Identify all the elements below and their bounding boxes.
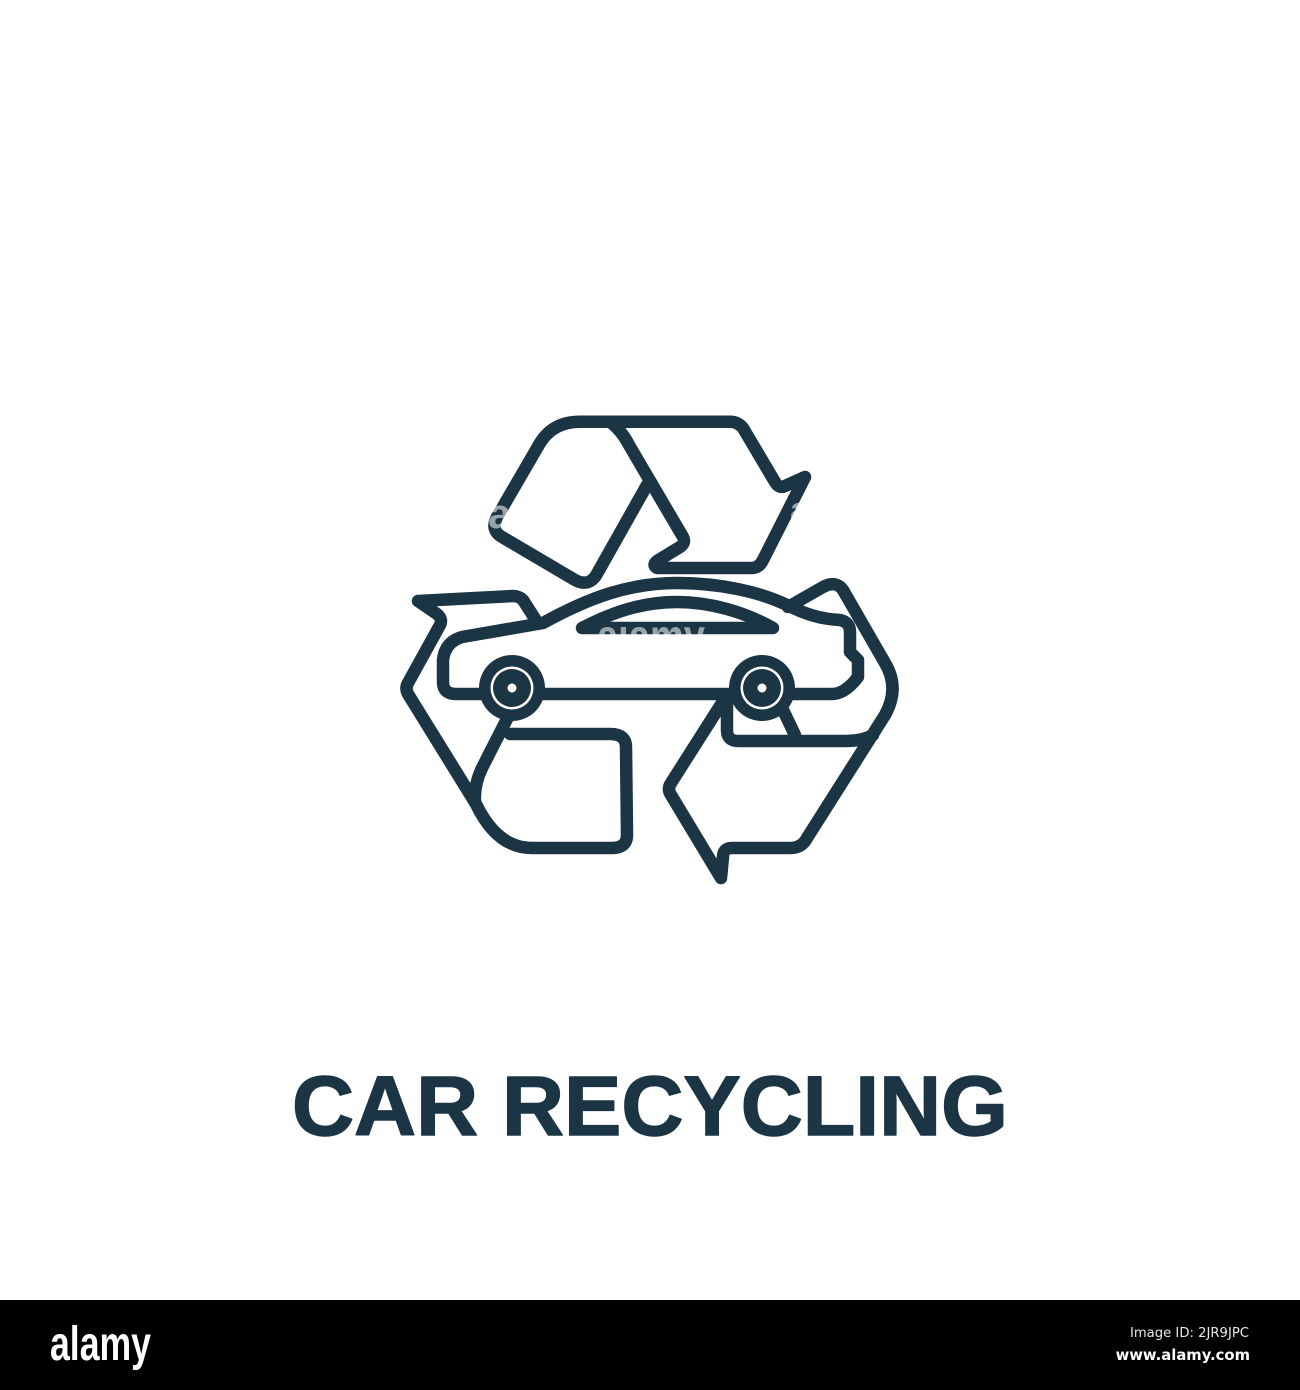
icon: left recycling arrow	[406, 596, 627, 848]
watermark remnants: a	[790, 489, 811, 530]
title: CAR RECYCLING	[292, 1059, 1008, 1153]
footer logo: alamy	[50, 1318, 151, 1371]
icon: right recycling arrow	[669, 584, 892, 878]
infographic canvas	[0, 416, 1300, 1390]
icon: top recycling arrow, right head	[610, 422, 805, 568]
footer bar	[0, 1300, 1300, 1390]
icon: car window	[582, 602, 773, 628]
watermark remnants: a	[488, 490, 512, 537]
website: www.alamy.com	[1116, 1347, 1250, 1364]
watermark remnants	[489, 502, 799, 634]
icon: right wheel	[729, 655, 795, 721]
icon: top recycling arrow, left fold	[494, 422, 647, 583]
icon: left wheel	[479, 655, 545, 721]
watermark remnants: alamy	[597, 610, 705, 662]
image id: Image ID: 2JR9JPC	[1130, 1326, 1249, 1341]
icon: car body	[443, 583, 858, 694]
icon: right recycling arrow, inner fold	[727, 695, 873, 741]
icon: car recycling symbol	[406, 422, 892, 878]
